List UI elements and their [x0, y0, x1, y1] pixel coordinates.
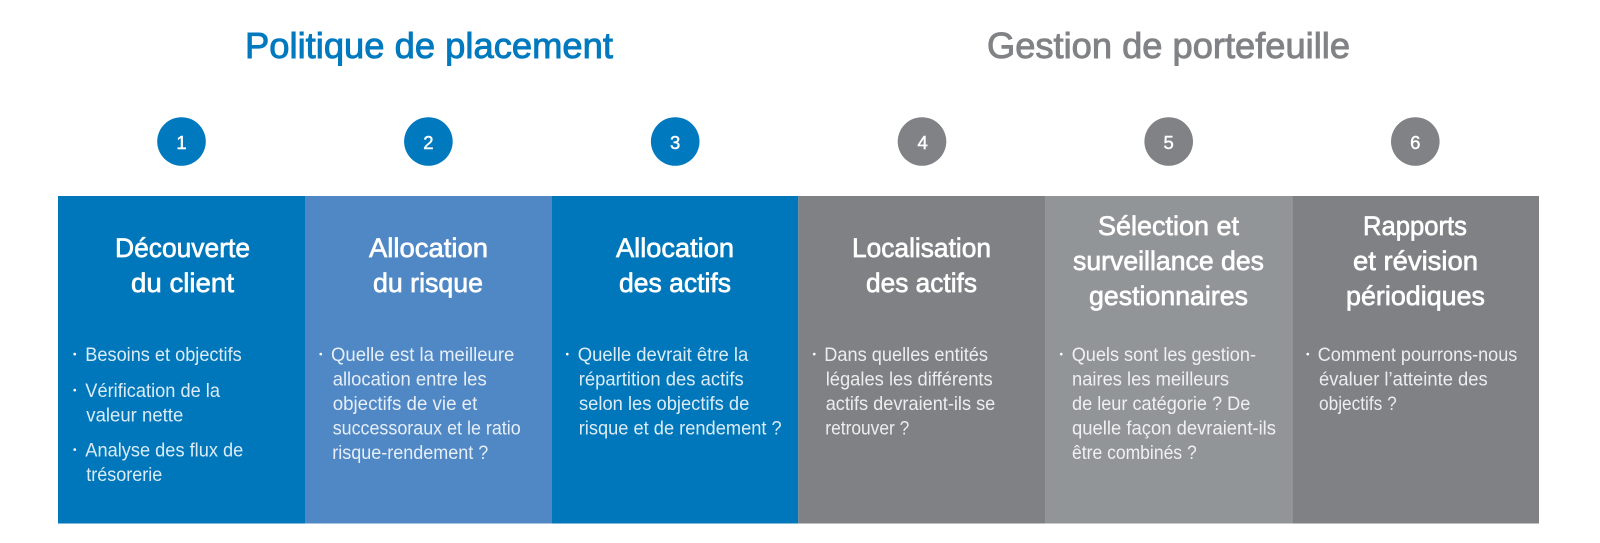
number badge 3 [651, 117, 700, 166]
panel: Sélection et surveillance des gestionnaires [1045, 196, 1292, 524]
bullet list [73, 344, 243, 486]
bullet list: objectifs ? [1319, 393, 1397, 415]
panel: Localisation des actifs [798, 196, 1045, 524]
bullet list: valeur nette [86, 405, 183, 427]
number badge 4 [898, 117, 946, 166]
panel title: Sélection et [1098, 211, 1240, 241]
panel title: du risque [373, 268, 483, 298]
number badge 3: 3 [670, 132, 680, 153]
panel title: périodiques [1346, 281, 1485, 311]
bullet list: Analyse des flux de [85, 440, 243, 462]
bullet list: • [73, 445, 77, 456]
panel: Rapports et révision périodiques [1292, 196, 1539, 524]
bullet list [812, 344, 995, 439]
panel title [115, 233, 250, 298]
bullet list: de leur catégorie ? De [1072, 393, 1250, 415]
number badge 6 [1391, 117, 1440, 166]
bullet list: répartition des actifs [579, 369, 744, 391]
bullet list: être combinés ? [1072, 442, 1197, 464]
bullet list: objectifs de vie et [333, 393, 478, 415]
panel title [1073, 211, 1264, 311]
number badge 5: 5 [1164, 132, 1174, 153]
panel title: Localisation [852, 233, 991, 263]
panel title: des actifs [619, 268, 731, 298]
bullet list [1306, 344, 1518, 415]
step 5 [1045, 117, 1292, 523]
panel title: du client [131, 268, 235, 298]
bullet list: Dans quelles entités [824, 344, 988, 366]
bullet list: • [1306, 350, 1310, 361]
bullet list: risque-rendement ? [332, 442, 488, 464]
bullet list [1060, 344, 1276, 464]
bullet list: risque et de rendement ? [579, 417, 782, 439]
panel: Découverte du client [58, 196, 305, 524]
bullet list: allocation entre les [333, 369, 487, 391]
step 4 [798, 117, 1045, 523]
heading: Gestion de portefeuille: Gestion de portefeuille [987, 25, 1350, 66]
bullet list: actifs devraient-ils se [826, 393, 995, 415]
heading: Politique de placement: Politique de placement [245, 25, 613, 66]
bullet list: Besoins et objectifs [85, 344, 242, 366]
bullet list: • [566, 350, 570, 361]
panel title: Allocation [616, 233, 734, 263]
step 1 [58, 117, 305, 523]
step 6 [1292, 117, 1539, 523]
bullet list: quelle façon devraient-ils [1072, 417, 1276, 439]
panel title: et révision [1353, 246, 1478, 276]
bullet list: • [73, 350, 77, 361]
panel title: surveillance des [1073, 246, 1264, 276]
bullet list: Vérification de la [85, 380, 220, 402]
panel title: Découverte [115, 233, 250, 263]
step 2 [305, 117, 552, 523]
panel title: gestionnaires [1089, 281, 1248, 311]
bullet list: • [73, 386, 77, 397]
bullet list: Quels sont les gestion- [1072, 344, 1256, 366]
bullet list: • [812, 350, 816, 361]
panel title [616, 233, 734, 298]
bullet list [566, 344, 782, 439]
panel title: Allocation [369, 233, 488, 263]
bullet list: • [319, 350, 323, 361]
step 3 [552, 117, 798, 523]
bullet list: retrouver ? [825, 417, 909, 439]
panel title [1346, 211, 1485, 311]
number badge 5 [1144, 117, 1193, 166]
number badge 1: 1 [176, 132, 187, 153]
bullet list: selon les objectifs de [579, 393, 749, 415]
bullet list: • [1060, 350, 1064, 361]
number badge 6: 6 [1410, 132, 1420, 153]
bullet list [319, 344, 521, 464]
bullet list: Comment pourrons-nous [1318, 344, 1518, 366]
number badge 2 [404, 117, 453, 166]
bullet list: Quelle devrait être la [578, 344, 748, 366]
bullet list: trésorerie [86, 464, 162, 486]
panel title [369, 233, 488, 298]
panel title: des actifs [866, 268, 977, 298]
panel title: Rapports [1363, 211, 1467, 241]
number badge 1 [157, 117, 206, 166]
panel title [852, 233, 991, 298]
bullet list: Quelle est la meilleure [331, 344, 514, 366]
bullet list: successoraux et le ratio [333, 417, 521, 439]
panel: Allocation des actifs [552, 196, 798, 524]
number badge 2: 2 [423, 132, 434, 153]
bullet list: naires les meilleurs [1072, 369, 1229, 391]
bullet list: légales les différents [826, 369, 993, 391]
number badge 4: 4 [917, 132, 928, 153]
panel: Allocation du risque [305, 196, 552, 524]
bullet list: évaluer l’atteinte des [1319, 369, 1488, 391]
